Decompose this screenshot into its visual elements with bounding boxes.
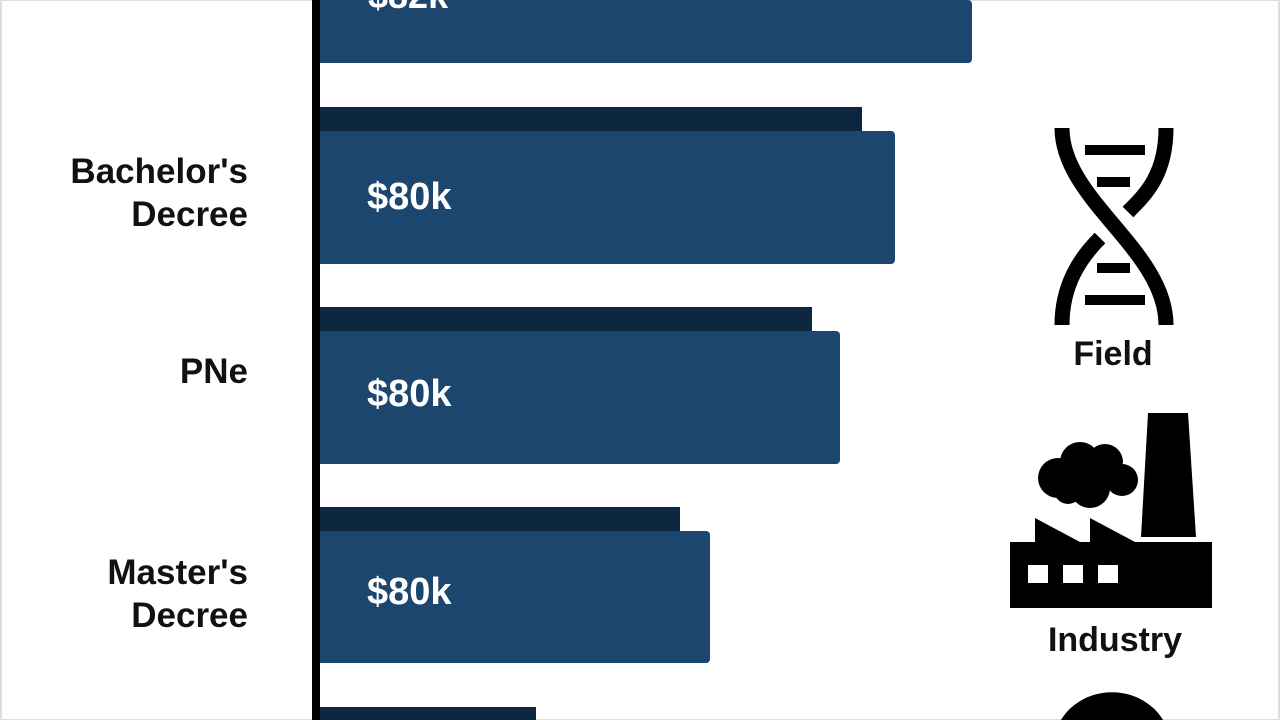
bar: Bachelor's Decree: [316, 107, 895, 264]
label: Industry: Industry: [1048, 621, 1182, 659]
label: PNe: PNe: [180, 352, 248, 391]
icon: DNA: [1062, 128, 1166, 325]
bar: PNe: [316, 307, 840, 464]
label: Field: Field: [1073, 335, 1153, 373]
bar: Bachelor's Decree: $80k: [367, 176, 452, 218]
bar: bottom partial: [316, 707, 536, 720]
bar: Master's Decree: [316, 507, 710, 663]
icon: partial circle: [1061, 692, 1163, 720]
label: Bachelor's Decree: Decree: [131, 195, 248, 234]
label: Master's Decree: Decree: [131, 596, 248, 635]
bar: Master's Decree: $80k: [367, 571, 452, 613]
icon: factory: [1010, 413, 1212, 608]
label: Bachelor's Decree: Bachelor's: [70, 152, 248, 191]
bar: top $82k: [316, 0, 972, 63]
axis line: [312, 0, 320, 720]
bar: PNe: $80k: [367, 373, 452, 415]
label: Master's Decree: Master's: [107, 553, 248, 592]
bar chart: [312, 0, 972, 720]
category labels: [70, 152, 248, 635]
